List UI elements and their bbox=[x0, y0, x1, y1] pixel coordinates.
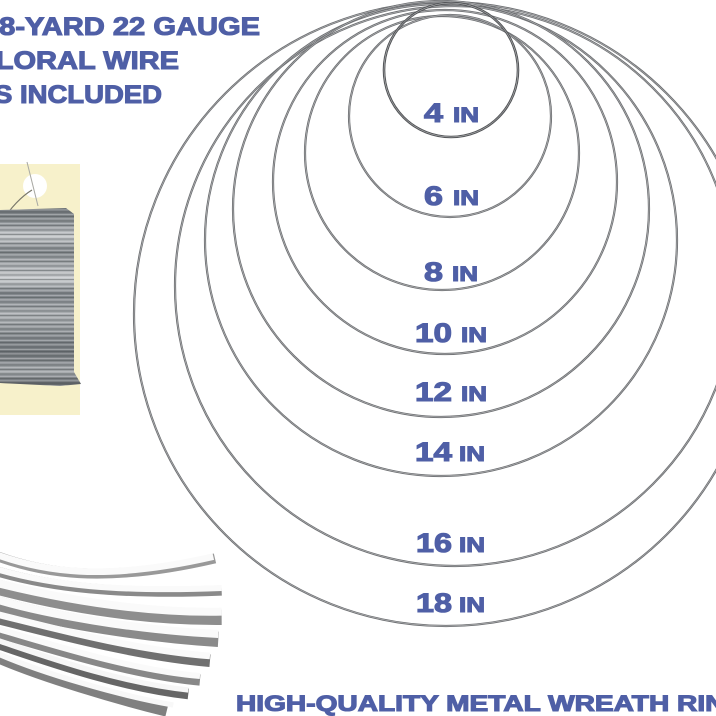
label: 6 in: 6 bbox=[424, 181, 443, 211]
label: 16 in bbox=[416, 528, 485, 558]
label: 12 in: IN bbox=[461, 383, 487, 406]
metal wreath rings bbox=[134, 1, 716, 626]
label: 4 in bbox=[424, 98, 479, 128]
label: 8 in bbox=[424, 257, 478, 287]
label: 18 in bbox=[416, 588, 485, 618]
ring: 14 in bbox=[205, 4, 677, 476]
ring: 16 in bbox=[175, 6, 716, 566]
icon: wire strands close-up bbox=[0, 555, 222, 711]
label: 16 in: IN bbox=[459, 534, 485, 557]
label: 4 in: IN bbox=[453, 104, 479, 127]
label: 12 in: 12 bbox=[415, 377, 452, 407]
label: 4 in: 4 bbox=[424, 98, 443, 128]
label: 10 in bbox=[415, 318, 487, 348]
label: 10 in: 10 bbox=[415, 318, 452, 348]
ring: 10 in bbox=[273, 10, 617, 354]
size labels bbox=[415, 98, 487, 618]
label: 8 in: IN bbox=[452, 263, 478, 286]
label: 14 in: IN bbox=[459, 443, 485, 466]
label: 12 in bbox=[415, 377, 487, 407]
label: 6 in: IN bbox=[453, 187, 479, 210]
heading: floral wire bbox=[0, 13, 260, 109]
ring: 12 in bbox=[233, 1, 649, 417]
label: 18 in: IN bbox=[459, 594, 485, 617]
ring: 18 in bbox=[134, 2, 716, 626]
ring: 8 in bbox=[305, 16, 579, 290]
label: 14 in: 14 bbox=[415, 437, 452, 467]
ring: 4 in bbox=[384, 3, 518, 137]
label: 8 in: 8 bbox=[424, 257, 443, 287]
label: 16 in: 16 bbox=[416, 528, 452, 558]
icon: wire spool on cream card bbox=[0, 162, 81, 415]
label: 14 in bbox=[415, 437, 485, 467]
label: 18 in: 18 bbox=[416, 588, 452, 618]
caption: metal wreath rings: HIGH-QUALITY METAL WREATH RINGS bbox=[236, 691, 716, 716]
ring: 6 in bbox=[349, 15, 551, 217]
label: 10 in: IN bbox=[461, 324, 487, 347]
label: 6 in bbox=[424, 181, 479, 211]
